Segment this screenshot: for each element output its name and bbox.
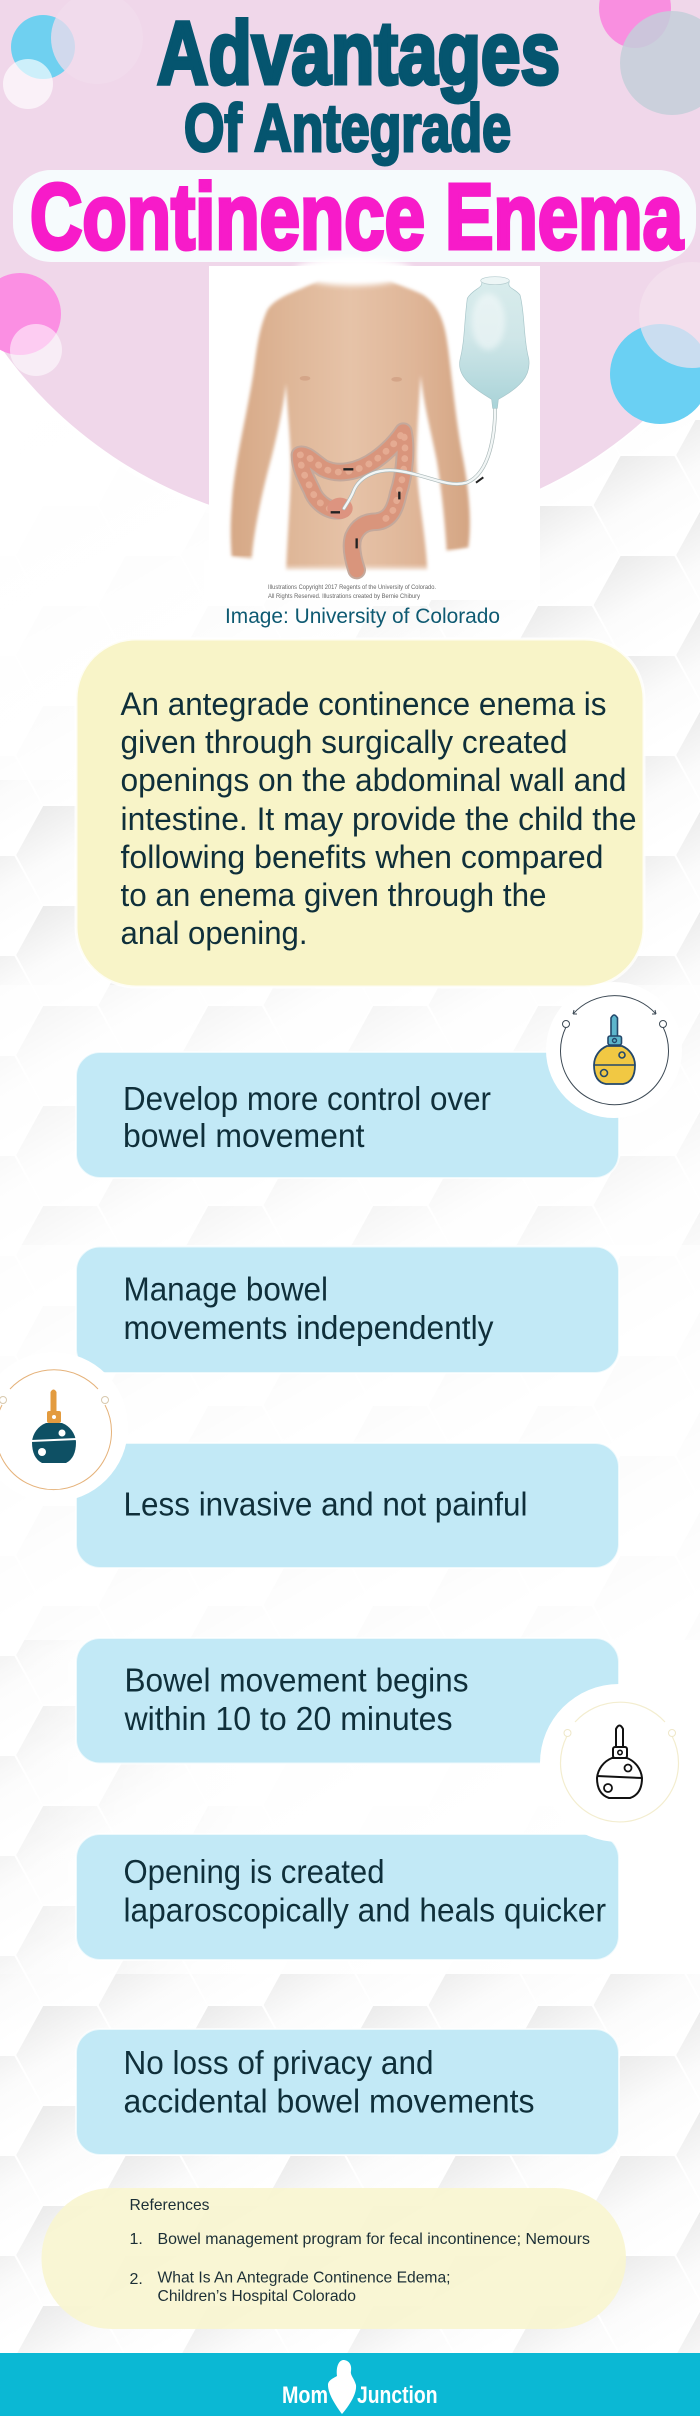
panel: intro text (76, 639, 644, 987)
panel: references (42, 2188, 626, 2329)
panel: references: 1. (130, 2231, 143, 2248)
body (231, 280, 470, 572)
panel: references: Children’s Hospital Colorado (158, 2288, 356, 2305)
illustration panel: body with enema bag: All Rights Reserved. Illustrations created by Bernie Chibury (268, 593, 421, 600)
panel: references: 2. (130, 2271, 143, 2288)
panel: benefit 4 (76, 1638, 619, 1764)
illustration panel: body with enema bag (204, 258, 540, 600)
panel: benefit 4: Bowel movement begins (124, 1662, 468, 1698)
footer band: Junction (357, 2382, 438, 2409)
title line 2: Of Antegrade (184, 91, 511, 166)
panel: references: References (130, 2197, 210, 2214)
panel: intro text: following benefits when compared (120, 839, 604, 875)
panel: references: What Is An Antegrade Continence Edema; (158, 2270, 450, 2286)
icon: yellow enema bulb (546, 982, 682, 1118)
panel: benefit 5 (76, 1834, 619, 1960)
pink header background (0, 0, 700, 535)
title line 1: Advantages (157, 2, 560, 102)
colon (300, 432, 405, 570)
decorative circles (0, 0, 700, 424)
panel: references: Bowel management program for fecal incontinence; Nemours (158, 2231, 590, 2248)
title (13, 2, 696, 268)
panel: intro text: to an enema given through the (120, 877, 546, 913)
panel: benefit 3: Less invasive and not painful (124, 1486, 528, 1522)
logo figure (328, 2360, 356, 2414)
panel: benefit 1 (76, 1052, 619, 1178)
panel: intro text: openings on the abdominal wall and (120, 762, 626, 798)
panel: intro text: anal opening. (120, 915, 308, 951)
panel: benefit 2 (76, 1246, 619, 1373)
image caption: Image: University of Colorado (225, 604, 500, 628)
logo text: Mom (282, 2382, 328, 2409)
panel: benefit 4: within 10 to 20 minutes (124, 1700, 453, 1737)
panel: benefit 5: Opening is created (124, 1853, 384, 1890)
bowel arrows (331, 469, 399, 548)
panel: benefit 5: laparoscopically and heals quicker (124, 1892, 606, 1928)
footer band (0, 2353, 700, 2416)
panel: benefit 6: No loss of privacy and (124, 2044, 434, 2081)
enema bag (460, 282, 529, 408)
fade overlays (293, 258, 413, 286)
panel: benefit 3 (76, 1443, 619, 1568)
tube (344, 400, 495, 508)
panel: intro text: intestine. It may provide the child the (120, 801, 636, 837)
panel: intro text: given through surgically created (120, 724, 568, 760)
title pill (13, 170, 696, 262)
panel: intro text: An antegrade continence enema is (120, 686, 606, 722)
panel: benefit 6: accidental bowel movements (124, 2082, 534, 2120)
icon: outline enema bulb (540, 1684, 698, 1842)
illustration copyright: Illustrations Copyright 2017 Regents of the University of Colorado. (268, 584, 436, 591)
icon: teal enema bulb (0, 1352, 128, 1502)
panel: benefit 1: Develop more control over (123, 1080, 491, 1117)
panel: benefit 2: Manage bowel (124, 1270, 328, 1308)
panel: benefit 1: bowel movement (123, 1117, 364, 1154)
panel: benefit 2: movements independently (124, 1309, 494, 1346)
panel: benefit 6 (76, 2029, 619, 2155)
